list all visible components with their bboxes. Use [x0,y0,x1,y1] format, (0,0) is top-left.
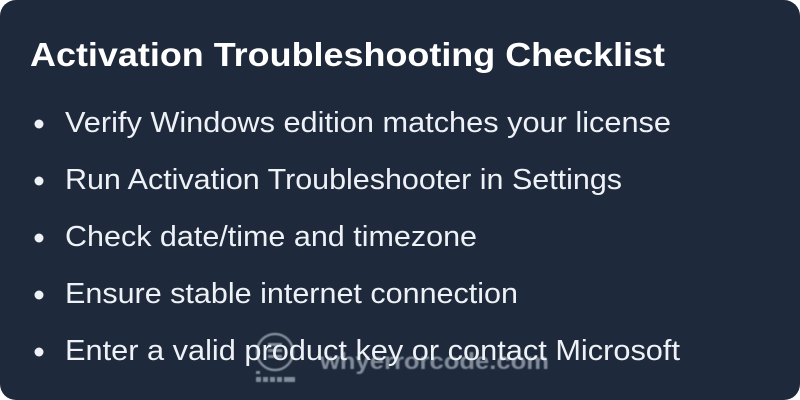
item 1: Verify Windows edition matches your license [65,107,671,139]
watermark text: whyerrorcode.com [319,348,549,374]
item 3: Check date/time and timezone [65,221,477,253]
title: Activation Troubleshooting Checklist [30,36,665,73]
item 4: Ensure stable internet connection [65,278,518,310]
checklist [34,107,680,367]
watermark [256,334,549,382]
item 5: Enter a valid product key or contact Microsoft [65,335,680,367]
item 2: Run Activation Troubleshooter in Settings [65,164,622,196]
icon: watermark logo [256,334,295,382]
